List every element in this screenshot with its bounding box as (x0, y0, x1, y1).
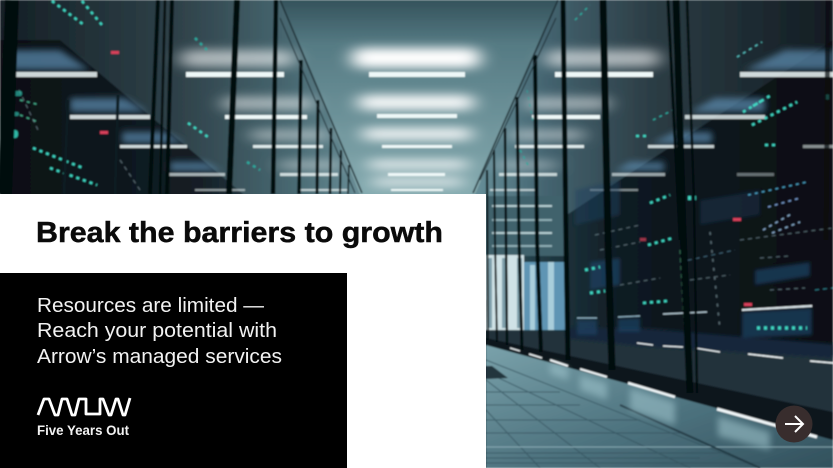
left server racks (0, 40, 250, 200)
small floor vent (486, 366, 508, 379)
icon: next arrow button (776, 406, 812, 442)
red status LEDs (100, 51, 752, 306)
text block: message: Resources are limited — (37, 295, 264, 317)
teal status LEDs (20, 1, 833, 328)
floor (486, 344, 833, 468)
text block: message: Arrow’s managed services (37, 346, 282, 368)
blue rack panels (575, 180, 812, 338)
large teal blobs (3, 91, 22, 138)
tagline: Five Years Out (37, 423, 129, 438)
left wall (0, 0, 362, 200)
text block: message (37, 295, 282, 368)
far end bright windows (486, 196, 566, 330)
rack indicator dashes (19, 90, 833, 330)
right wall (473, 0, 833, 300)
floor reflections (550, 362, 770, 450)
right pillars (473, 0, 697, 393)
ceiling (280, 0, 558, 200)
panel: white headline block (0, 194, 486, 468)
panel: black message block (0, 273, 347, 468)
far right dark edge (826, 0, 828, 240)
ceiling light strips (7, 72, 833, 191)
floor tile lines (486, 360, 833, 468)
icon: Arrow logo wave mark (38, 398, 130, 415)
reflected blue glows (8, 50, 833, 171)
dark kerb along glass base (486, 338, 833, 440)
ceiling light glows (180, 48, 660, 186)
lower glass panel (486, 330, 833, 420)
right server racks (486, 40, 833, 360)
text block: message: Reach your potential with (37, 320, 277, 342)
heading: Break the barriers to growth (36, 217, 443, 249)
left pillars (5, 0, 362, 194)
white base light strips (510, 306, 833, 437)
